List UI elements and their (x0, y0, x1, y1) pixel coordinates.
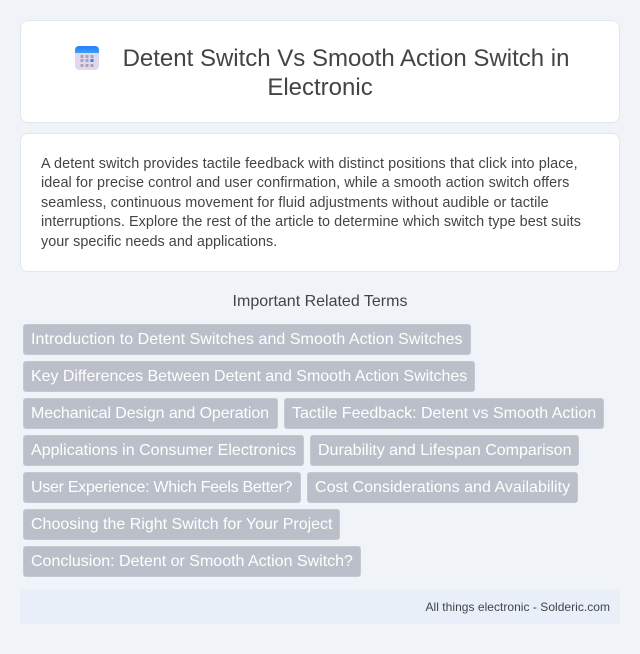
tag: key differences: Key Differences Between Detent and Smooth Action Switches (31, 368, 467, 385)
tag: tactile feedback (284, 398, 604, 429)
intro text: seamless, continuous movement for fluid adjustments without audible or tactile (41, 194, 549, 210)
tag: durability: Durability and Lifespan Comparison (318, 442, 571, 459)
tag: conclusion: Conclusion: Detent or Smooth Action Switch? (31, 553, 353, 570)
tag: durability (310, 435, 579, 466)
header card (20, 20, 620, 123)
intro card (20, 133, 620, 272)
section heading: Important Related Terms (233, 293, 407, 310)
intro text: interruptions. Explore the rest of the article to determine which switch type best suits (41, 214, 581, 230)
tag: introduction: Introduction to Detent Switches and Smooth Action Switches (31, 331, 463, 348)
tag: mechanical design (23, 398, 278, 429)
intro text (41, 156, 581, 250)
tag: choosing (23, 509, 340, 540)
tag: cost: Cost Considerations and Availability (315, 479, 570, 496)
intro text: your specific needs and applications. (41, 234, 277, 250)
tag: applications (23, 435, 304, 466)
intro text: ideal for precise control and user confirmation, while a smooth action switch offers (41, 175, 569, 191)
footer (20, 590, 620, 624)
title: Electronic (267, 74, 373, 100)
icon: calendar grid (75, 46, 99, 70)
tag: user experience (23, 472, 301, 503)
tag: choosing: Choosing the Right Switch for Your Project (31, 516, 332, 533)
tag: mechanical design: Mechanical Design and Operation (31, 405, 269, 422)
tag: tactile feedback: Tactile Feedback: Detent vs Smooth Action (292, 405, 596, 422)
tag: applications: Applications in Consumer Electronics (31, 442, 296, 459)
tag: user experience: User Experience: Which Feels Better? (31, 479, 292, 496)
title (123, 45, 569, 100)
tag: cost (307, 472, 578, 503)
intro text: A detent switch provides tactile feedback with distinct positions that click into place, (41, 156, 578, 172)
title: Detent Switch Vs Smooth Action Switch in (123, 45, 569, 72)
tag: introduction (23, 324, 471, 355)
tag list (23, 324, 604, 577)
tag: conclusion (23, 546, 361, 577)
footer: All things electronic - Solderic.com (426, 600, 610, 614)
tag: key differences (23, 361, 475, 392)
